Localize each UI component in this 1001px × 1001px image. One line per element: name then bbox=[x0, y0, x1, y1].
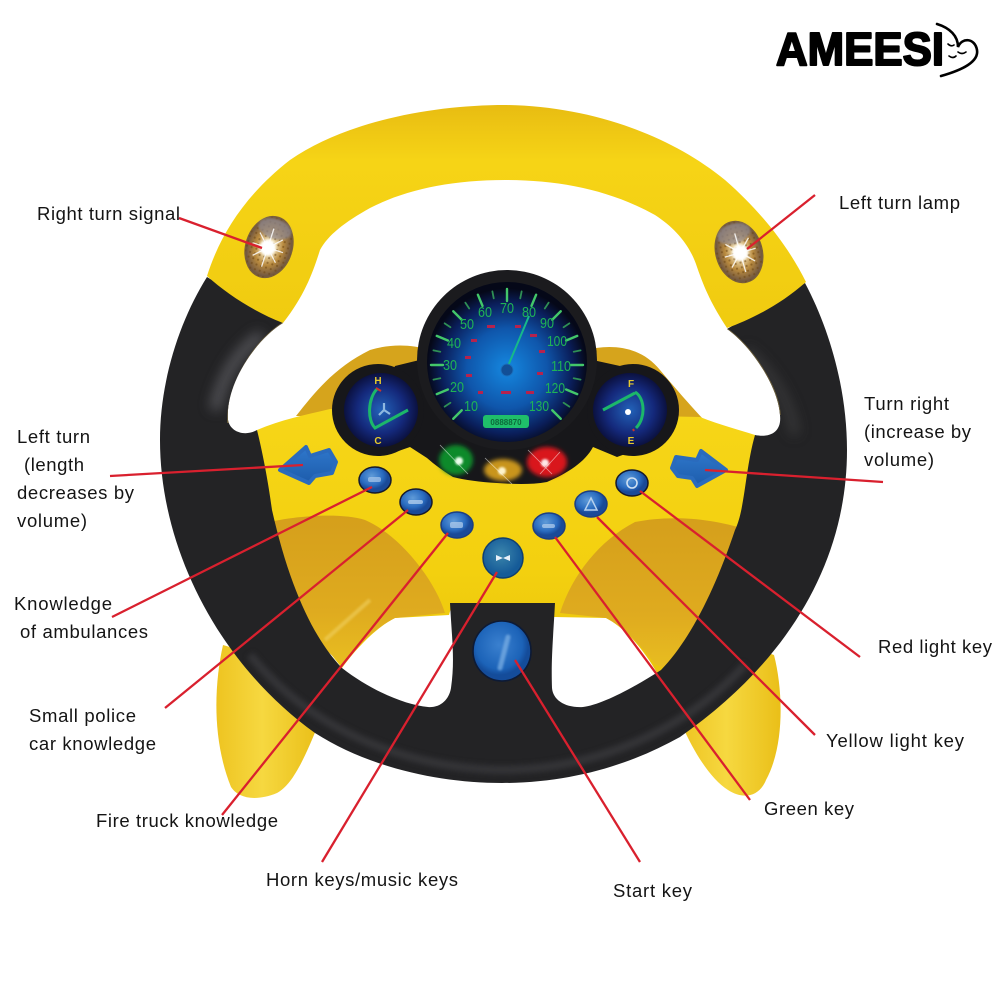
label: green key: Green key bbox=[764, 798, 855, 819]
line: left turn bbox=[110, 465, 303, 476]
speed numbers: 120 bbox=[545, 380, 565, 397]
black grip ring with hub bbox=[160, 277, 847, 783]
label: left turn lamp: Left turn lamp bbox=[839, 192, 960, 213]
label: turn right: volume) bbox=[864, 449, 934, 470]
right small gauge: E bbox=[628, 436, 635, 447]
label: police bbox=[29, 705, 156, 754]
button: yellow light bbox=[575, 491, 607, 517]
left small gauge: C bbox=[374, 436, 382, 447]
label: fire truck: Fire truck knowledge bbox=[96, 810, 278, 831]
speed numbers: 40 bbox=[447, 335, 461, 352]
dashboard housing bbox=[360, 355, 650, 484]
right small gauge: F bbox=[628, 379, 634, 390]
speed numbers: 130 bbox=[529, 398, 549, 415]
speed numbers bbox=[443, 300, 571, 415]
label: start key: Start key bbox=[613, 880, 693, 901]
button: green key bbox=[533, 513, 565, 539]
label: police: Small police bbox=[29, 705, 136, 726]
label: left turn: volume) bbox=[17, 510, 87, 531]
speedometer: 0888870 bbox=[490, 418, 522, 427]
line: red light bbox=[640, 491, 860, 657]
line: start bbox=[515, 660, 640, 862]
speed numbers: 70 bbox=[500, 300, 514, 317]
line: yellow light bbox=[597, 517, 815, 735]
ring sheen bbox=[215, 323, 795, 770]
yellow top arc bbox=[207, 105, 806, 328]
label: turn right bbox=[864, 393, 972, 470]
label: horn keys: Horn keys/music keys bbox=[266, 869, 458, 890]
label: ambulances: of ambulances bbox=[20, 621, 148, 642]
label: turn right: Turn right bbox=[864, 393, 949, 414]
red pointer lines bbox=[110, 195, 883, 862]
label: left turn: (length bbox=[24, 454, 84, 475]
left small gauge: H bbox=[374, 376, 382, 387]
button: horn bbox=[483, 538, 523, 578]
button: fire truck bbox=[441, 512, 473, 538]
left turn lamp bbox=[708, 216, 770, 288]
steering wheel toy bbox=[160, 105, 847, 798]
right stand leg bbox=[682, 650, 781, 796]
minor ticks bbox=[433, 291, 581, 407]
button: red light bbox=[616, 470, 648, 496]
left arrow button bbox=[280, 447, 336, 483]
speed numbers: 90 bbox=[540, 315, 554, 332]
indicator lights bbox=[439, 445, 567, 484]
speed numbers: 110 bbox=[551, 358, 571, 375]
red speed dashes bbox=[465, 325, 545, 394]
line: turn right bbox=[705, 470, 883, 482]
label: ambulances bbox=[14, 593, 148, 642]
label: left turn bbox=[17, 426, 135, 531]
line: police bbox=[165, 510, 408, 708]
right small gauge bbox=[587, 364, 679, 456]
left small gauge bbox=[332, 364, 424, 456]
right arrow button bbox=[672, 451, 726, 486]
line: fire truck bbox=[222, 533, 448, 815]
speed numbers: 20 bbox=[450, 379, 464, 396]
line: right turn signal bbox=[179, 218, 262, 248]
button: police car bbox=[400, 489, 432, 515]
left recess bbox=[262, 516, 445, 664]
label: red light key: Red light key bbox=[878, 636, 993, 657]
speed numbers: 80 bbox=[522, 304, 536, 321]
line: ambulance bbox=[112, 487, 372, 617]
odometer display bbox=[483, 415, 529, 428]
right recess bbox=[560, 518, 748, 668]
line: green key bbox=[555, 537, 750, 800]
start knob bbox=[473, 621, 531, 681]
speed numbers: 10 bbox=[464, 398, 478, 415]
right turn signal lamp bbox=[238, 210, 300, 284]
mustard housing behind gauges bbox=[296, 346, 704, 420]
label: turn right: (increase by bbox=[864, 421, 972, 442]
label: police: car knowledge bbox=[29, 733, 156, 754]
line: horn bbox=[322, 572, 497, 862]
needle bbox=[508, 316, 529, 366]
speed numbers: 100 bbox=[547, 333, 567, 350]
speed numbers: 60 bbox=[478, 304, 492, 321]
label: ambulances: Knowledge bbox=[14, 593, 112, 614]
button: ambulance bbox=[359, 467, 391, 493]
major ticks bbox=[431, 289, 583, 419]
speed numbers: 30 bbox=[443, 357, 457, 374]
label: left turn: Left turn bbox=[17, 426, 90, 447]
label: yellow light key: Yellow light key bbox=[826, 730, 965, 751]
label: right turn signal: Right turn signal bbox=[37, 203, 180, 224]
line: left turn lamp bbox=[747, 195, 815, 249]
recess highlight bbox=[325, 600, 370, 640]
label: left turn: decreases by bbox=[17, 482, 135, 503]
yellow spoke body bbox=[257, 409, 755, 680]
logo heart mark bbox=[937, 24, 977, 76]
speed numbers: 50 bbox=[460, 316, 474, 333]
left stand leg bbox=[216, 645, 318, 798]
brand logo: AMEESI bbox=[776, 23, 944, 75]
speedometer bbox=[417, 270, 597, 450]
